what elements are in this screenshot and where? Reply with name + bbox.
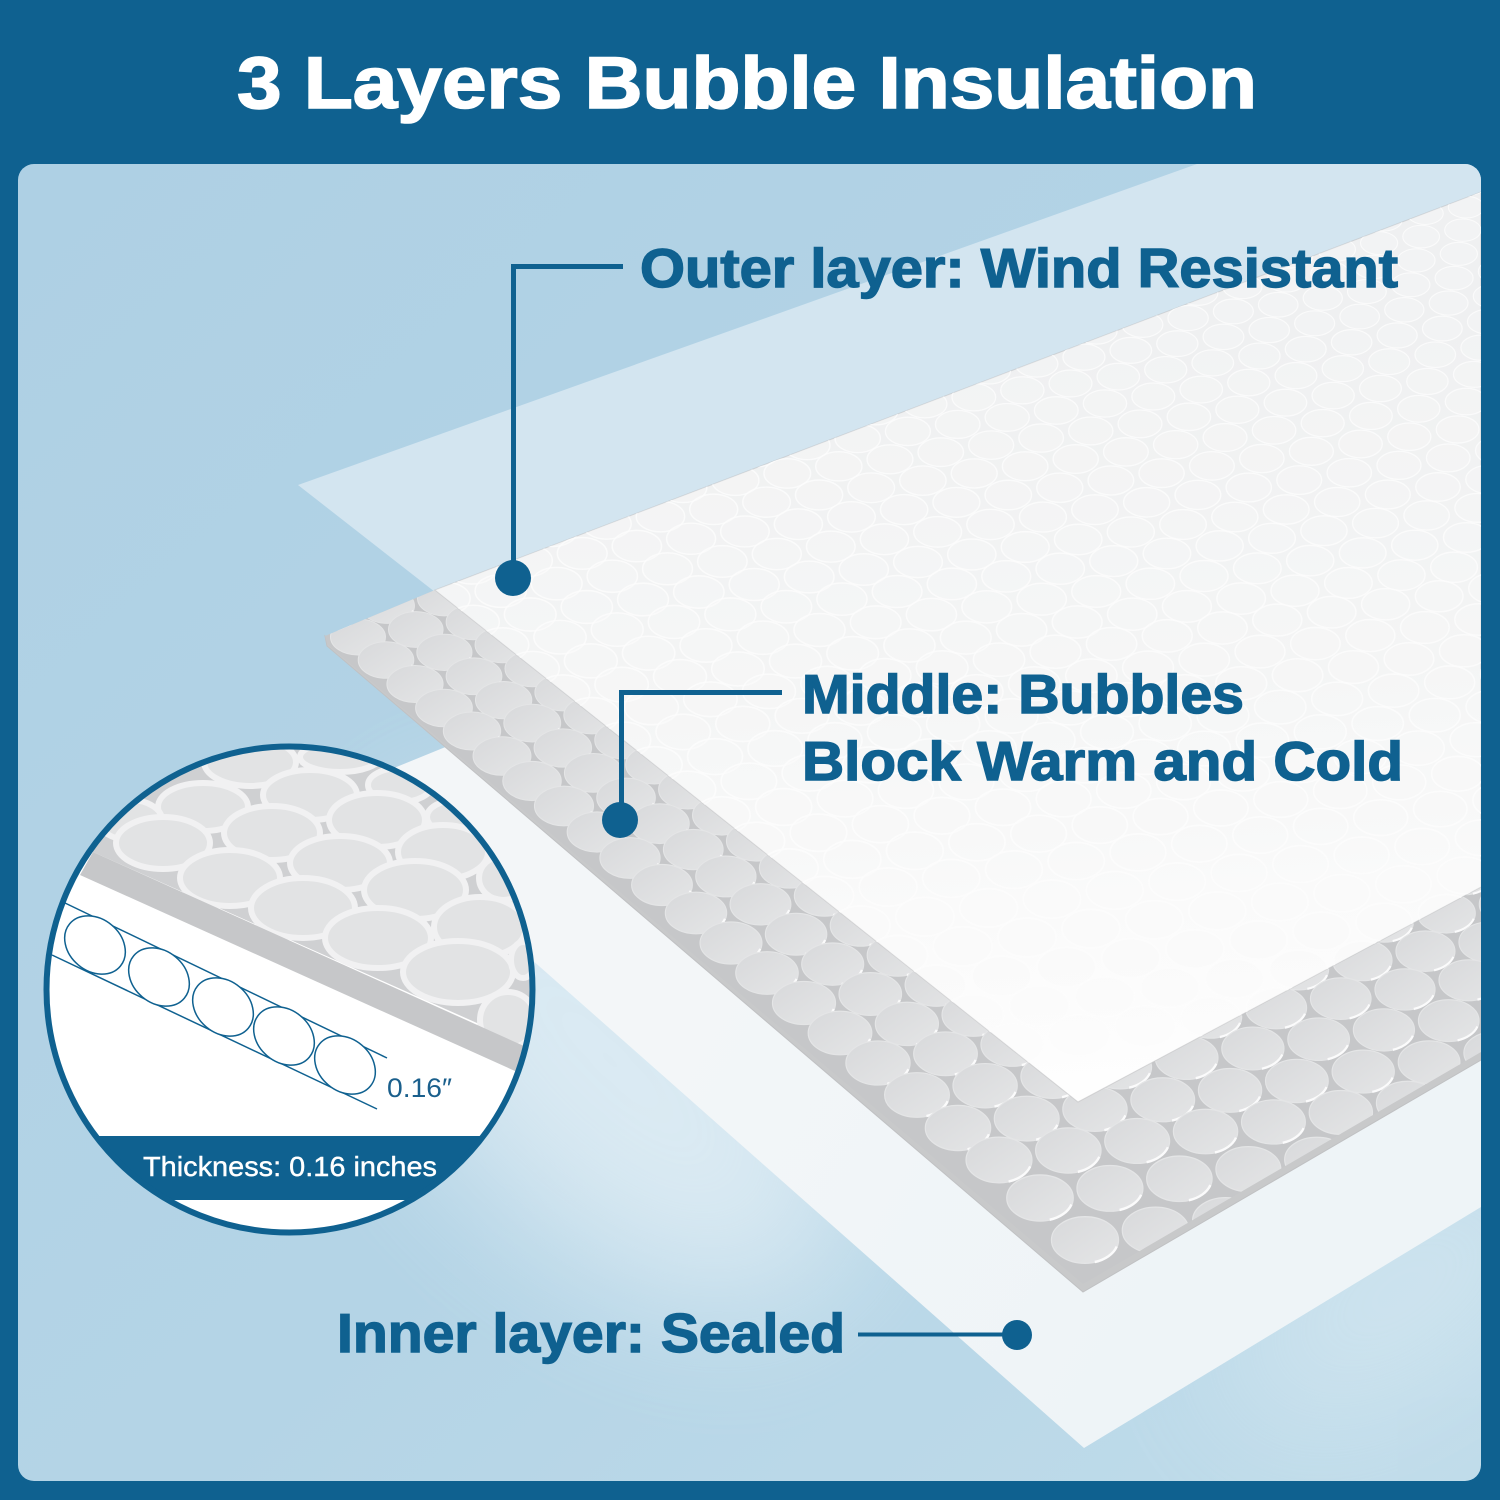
- outer translucent layer: [298, 164, 1481, 600]
- thickness detail circle: [44, 744, 536, 1236]
- sheet edge: [80, 852, 535, 1080]
- callout: middle layer: Middle: Bubbles: [802, 663, 1244, 725]
- bubble layer edge: [325, 636, 1481, 1292]
- title: 3 Layers Bubble Insulation: [237, 43, 1257, 124]
- middle bubble layer: [326, 590, 1481, 1282]
- top white layer with embossed bubbles: [434, 192, 1481, 1102]
- inner sealed layer: [340, 737, 1481, 1448]
- dimension label: 0.16″: [387, 1073, 452, 1103]
- callout: middle layer: [602, 663, 1403, 838]
- bubble cross-section diagram: [52, 903, 387, 1109]
- thickness label: Thickness: 0.16 inches: [143, 1151, 437, 1182]
- callout: outer layer: Outer layer: Wind Resistant: [640, 237, 1398, 299]
- blue label band: [99, 1136, 480, 1200]
- callout: inner layer: Inner layer: Sealed: [337, 1302, 845, 1364]
- bubble sheet close-up: [93, 750, 530, 1046]
- callout: middle layer: Block Warm and Cold: [802, 730, 1403, 792]
- callout: outer layer: [495, 237, 1398, 596]
